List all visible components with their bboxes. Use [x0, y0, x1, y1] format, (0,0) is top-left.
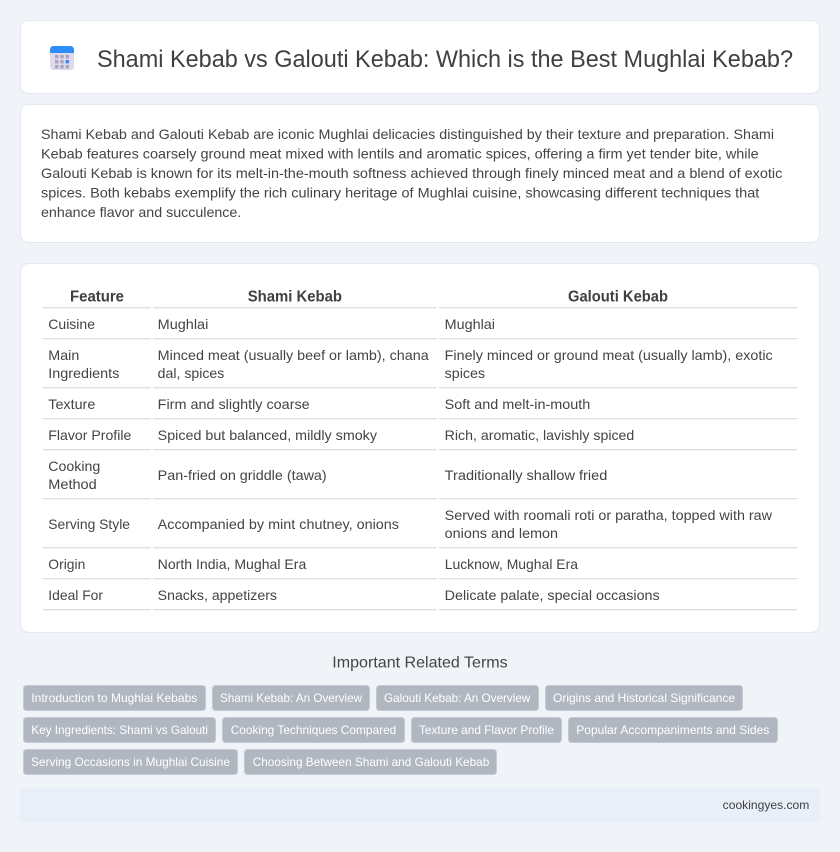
row: cuisine: Cuisine [48, 316, 95, 332]
row: serving style: onions and lemon [445, 525, 558, 541]
tag: Texture and Flavor Profile [419, 723, 554, 737]
text block: description: spices. Both kebabs exemplify the rich culinary heritage of Mughlai cuisine, showcasing different techniques that [41, 184, 759, 200]
row: cuisine [48, 316, 495, 332]
tag: Key Ingredients: Shami vs Galouti [31, 723, 208, 737]
row: texture [48, 396, 590, 412]
row: main ingredients [48, 347, 773, 381]
text block: description: enhance flavor and succulence. [41, 204, 241, 220]
title: Shami Kebab vs Galouti Kebab: Which is the Best Mughlai Kebab? [97, 46, 793, 73]
heading: important related terms: Important Related Terms [332, 655, 508, 672]
row: main ingredients: Ingredients [48, 365, 119, 381]
row: serving style: Serving Style [48, 516, 130, 532]
row: ideal for: Delicate palate, special occasions [445, 587, 660, 603]
row: origin: North India, Mughal Era [158, 556, 307, 572]
tag: Shami Kebab: An Overview [220, 691, 362, 705]
row: cooking method: Pan-fried on griddle (tawa) [158, 467, 327, 483]
tag [222, 718, 404, 742]
row: texture: Firm and slightly coarse [158, 396, 310, 412]
table header row: Galouti Kebab [568, 288, 668, 306]
tag: Cooking Techniques Compared [231, 723, 396, 737]
text block: description [41, 126, 782, 220]
row: main ingredients: Main [48, 347, 79, 363]
tag: Choosing Between Shami and Galouti Kebab [253, 755, 490, 769]
table header row: Feature [70, 288, 124, 306]
row: cooking method [48, 458, 607, 492]
text block: description: Kebab features coarsely ground meat mixed with lentils and aromatic spices, offering a firm yet tender bite, while [41, 146, 759, 162]
text block: description: Galouti Kebab is known for its melt-in-the-mouth softness achieved through finely minced meat and a blend of exotic [41, 165, 782, 181]
row: main ingredients: Finely minced or ground meat (usually lamb), exotic [445, 347, 773, 363]
row: cuisine: Mughlai [158, 316, 208, 332]
tag [376, 686, 538, 710]
tag: Serving Occasions in Mughlai Cuisine [31, 755, 230, 769]
tag [546, 686, 742, 710]
row: ideal for: Snacks, appetizers [158, 587, 277, 603]
row: flavor profile: Rich, aromatic, lavishly spiced [445, 427, 634, 443]
row: origin: Origin [48, 556, 85, 572]
row: origin [48, 556, 578, 572]
table header row: Shami Kebab [248, 288, 342, 306]
row: serving style: Accompanied by mint chutney, onions [158, 516, 399, 532]
row: serving style: Served with roomali roti or paratha, topped with raw [445, 507, 773, 523]
tag [24, 718, 216, 742]
row: cooking method: Traditionally shallow fried [445, 467, 607, 483]
tag [244, 750, 496, 774]
tag: Galouti Kebab: An Overview [384, 691, 531, 705]
row: main ingredients: spices [445, 365, 485, 381]
row: flavor profile: Flavor Profile [48, 427, 132, 443]
row: texture: Soft and melt-in-mouth [445, 396, 590, 412]
row: flavor profile [48, 427, 634, 443]
text block: description: Shami Kebab and Galouti Kebab are iconic Mughlai delicacies distinguished by their texture and preparation. Shami [41, 126, 774, 142]
tag [24, 750, 238, 774]
row: texture: Texture [48, 396, 96, 412]
tag: Origins and Historical Significance [553, 691, 735, 705]
row: flavor profile: Spiced but balanced, mildly smoky [158, 427, 377, 443]
tag [212, 686, 370, 710]
row: ideal for [48, 587, 660, 603]
row: cuisine: Mughlai [445, 316, 495, 332]
row: main ingredients: dal, spices [158, 365, 224, 381]
tag [568, 718, 778, 742]
tag: Popular Accompaniments and Sides [576, 723, 769, 737]
row: main ingredients: Minced meat (usually beef or lamb), chana [158, 347, 429, 363]
tag: Introduction to Mughlai Kebabs [31, 691, 197, 705]
related term tags [24, 686, 778, 774]
tag [412, 718, 562, 742]
table header row [70, 288, 668, 306]
footer bar: cookingyes.com [723, 798, 809, 812]
footer bar [20, 788, 820, 822]
panel: comparison table [20, 264, 820, 632]
panel: title header [20, 20, 820, 94]
icon: calendar [50, 46, 74, 70]
panel: description [20, 104, 820, 242]
row: origin: Lucknow, Mughal Era [445, 556, 578, 572]
row: serving style [48, 507, 773, 541]
row: ideal for: Ideal For [48, 587, 103, 603]
row: cooking method: Cooking [48, 458, 100, 474]
row: cooking method: Method [48, 476, 97, 492]
tag [24, 686, 206, 710]
